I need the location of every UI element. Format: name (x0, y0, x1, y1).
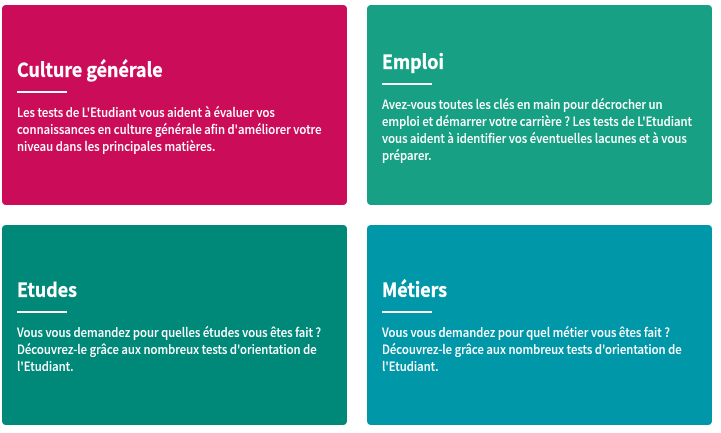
text block: Emploi: préparer. (382, 145, 432, 164)
text block: Métiers: Découvrez-le grâce aux nombreux tests d'orientation de (382, 339, 682, 358)
panel: Métiers (367, 225, 712, 425)
heading: Métiers: Métiers (382, 274, 447, 303)
panel: Etudes (2, 225, 347, 425)
heading: Culture générale: Culture générale (17, 54, 163, 83)
underline (382, 311, 432, 313)
underline (382, 83, 432, 85)
text block: Métiers: l'Etudiant. (382, 356, 439, 375)
heading: Emploi: Emploi (382, 46, 444, 75)
text block: Emploi: emploi et démarrer votre carrière ? Les tests de L'Etudiant (382, 111, 692, 130)
underline (17, 91, 67, 93)
panel: Culture générale (2, 5, 347, 205)
text block: Etudes: Vous vous demandez pour quelles études vous êtes fait ? (17, 322, 321, 341)
text block: Culture générale: Les tests de L'Etudiant vous aident à évaluer vos (17, 102, 275, 121)
text block: Emploi: vous aident à identifier vos éventuelles lacunes et à vous (382, 128, 687, 147)
heading: Etudes: Etudes (17, 274, 77, 303)
text block: Culture générale (17, 102, 322, 155)
text block: Métiers: Vous vous demandez pour quel métier vous êtes fait ? (382, 322, 670, 341)
text block: Culture générale: niveau dans les principales matières. (17, 136, 215, 155)
text block: Culture générale: connaissances en culture générale afin d'améliorer votre (17, 119, 321, 138)
underline (17, 311, 67, 313)
panel: Emploi (367, 5, 712, 205)
text block: Etudes (16, 322, 321, 375)
text block: Métiers (382, 322, 682, 375)
text block: Etudes: Découvrez-le grâce aux nombreux tests d'orientation de (17, 339, 317, 358)
text block: Emploi (382, 94, 692, 164)
text block: Emploi: Avez-vous toutes les clés en main pour décrocher un (382, 94, 663, 113)
text block: Etudes: l'Etudiant. (17, 356, 74, 375)
